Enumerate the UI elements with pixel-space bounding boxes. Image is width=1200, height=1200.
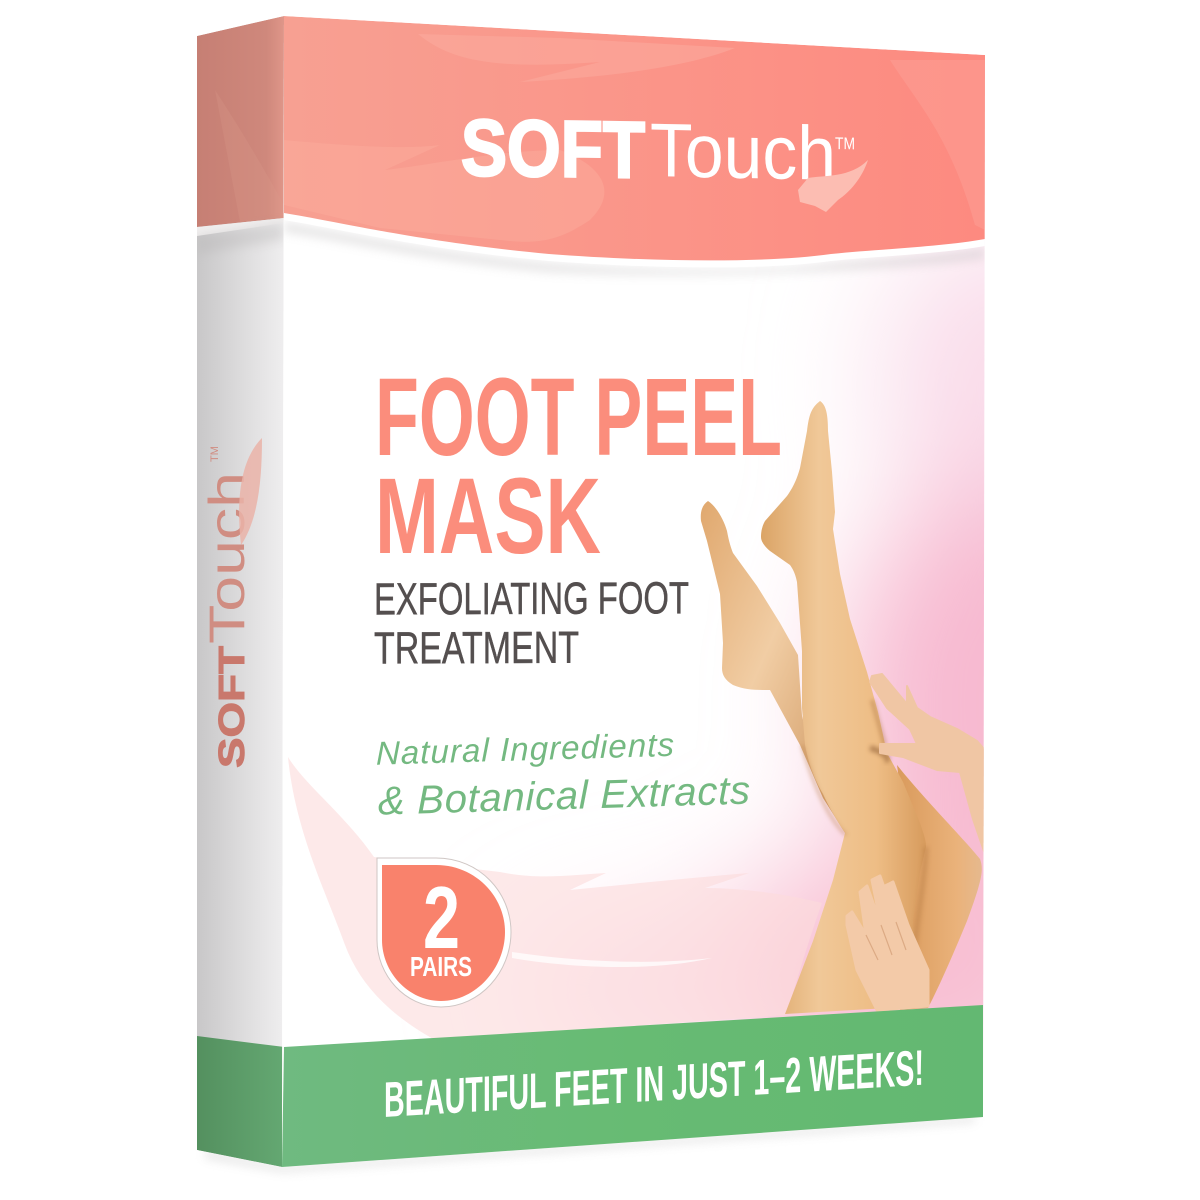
panel: pairs badge [377,858,511,1007]
heading: foot peel mask: FOOT PEEL [375,356,782,479]
leg shading [802,745,846,835]
tagline: & Botanical Extracts [378,769,750,824]
side brand text: Touch [199,472,255,644]
leaf vein [512,952,712,967]
subheading: TREATMENT [374,622,579,674]
brand logo: TM [835,134,855,153]
brand logo: Touch [650,108,836,197]
box ground shadow [205,1116,975,1172]
background pink glow [620,246,984,1058]
front leg and foot [761,401,926,1014]
brand logo [462,118,854,180]
panel: green footer band [282,1005,983,1167]
panel: pairs badge: PAIRS [410,951,472,982]
rear leg and foot [701,501,847,836]
brand logo: SOFT [461,103,645,195]
heading: foot peel mask: MASK [375,455,601,576]
icon: lower hand [847,876,928,1010]
subheading [374,572,689,674]
panel: front of box [282,16,985,1167]
heading: foot peel mask [375,356,782,576]
icon: upper hand [870,674,984,851]
tagline [376,724,750,824]
tagline: Natural Ingredients [376,726,674,772]
side brand text: SOFT [211,646,252,768]
decorative leaf on front [288,757,822,1040]
icon: feather [798,160,868,212]
subheading: EXFOLIATING FOOT [374,572,689,625]
panel: left side of box [197,16,284,1167]
panel: pairs badge: 2 [423,868,460,967]
header feathers [418,34,735,82]
side brand text: TM [209,446,221,462]
rear knee [897,765,982,1010]
side brand text [208,447,245,768]
panel: coral header band [284,16,985,275]
product box illustration [197,16,985,1174]
icon: legs illustration [701,401,984,1014]
icon: side feather [239,438,262,545]
